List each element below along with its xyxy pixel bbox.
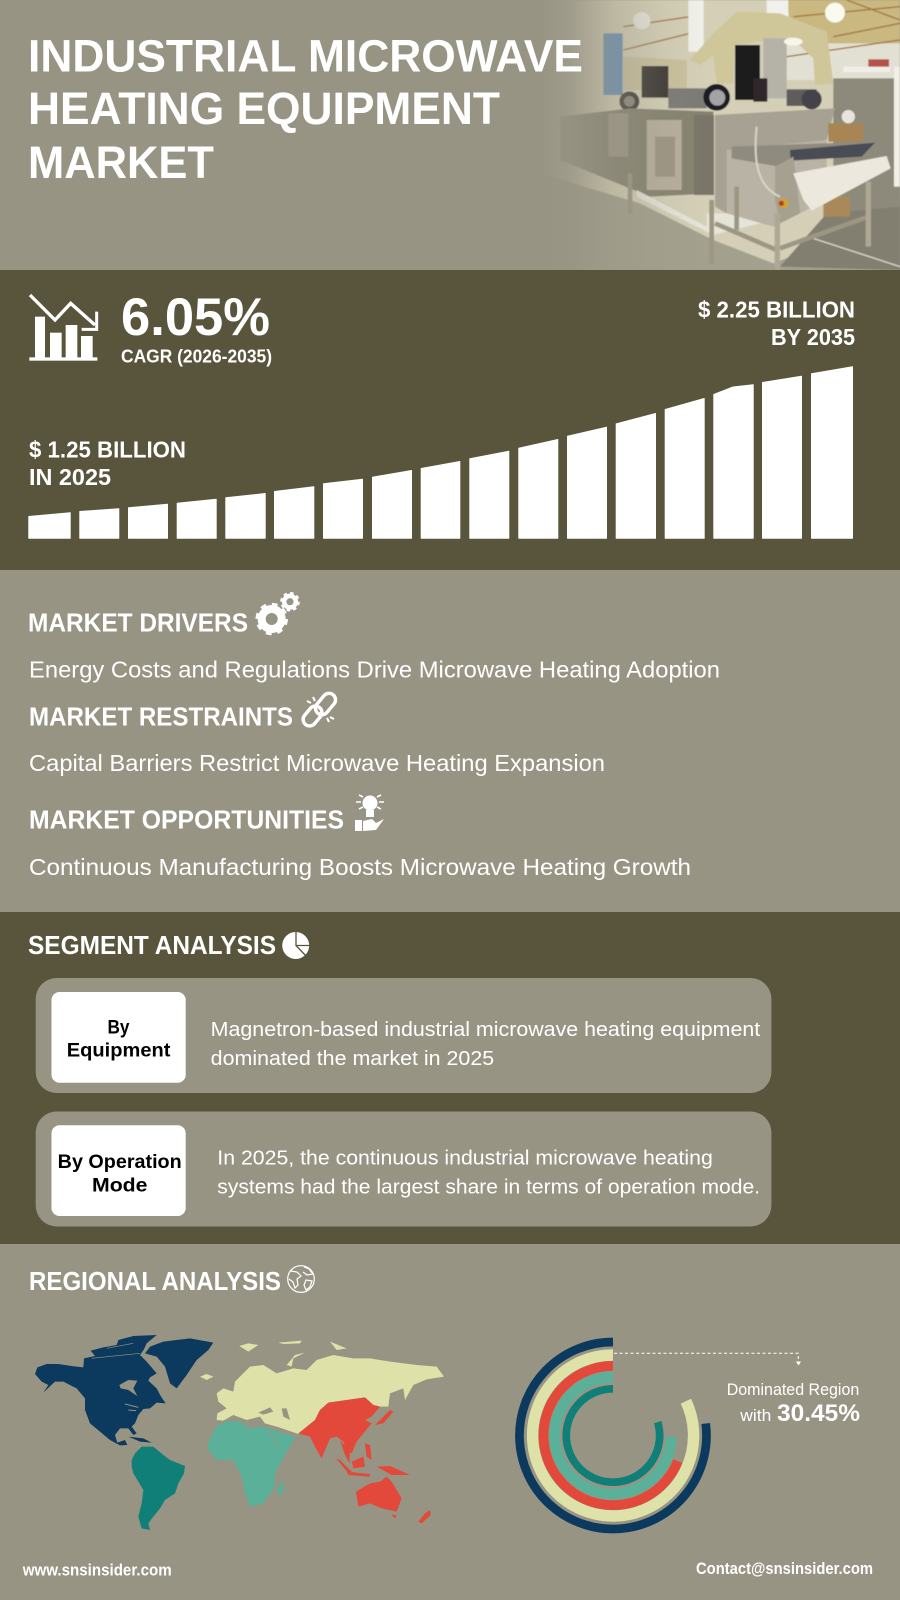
text: opportunity: Continuous Manufacturing Boosts Microwave Heating Growth (29, 854, 691, 880)
end value label: BY 2035 (771, 324, 855, 350)
end value label (698, 296, 855, 350)
text: equipment insight (211, 1019, 761, 1070)
footer: contact: Contact@snsinsider.com (696, 1559, 873, 1578)
photo: microwave heating conveyor machine (540, 0, 900, 270)
label box: by operation mode: By Operation (58, 1151, 182, 1173)
region: South America (132, 1447, 185, 1530)
callout: dominated region (727, 1381, 860, 1427)
panel: header background (0, 0, 900, 270)
heading: market drivers: MARKET DRIVERS (28, 610, 248, 638)
heading: market restraints: MARKET RESTRAINTS (29, 704, 293, 732)
icon: lightbulb in hand (355, 795, 384, 831)
icon: broken chain (300, 691, 338, 729)
text: operation mode insight: systems had the largest share in terms of operation mode. (217, 1177, 760, 1199)
start value label: IN 2025 (29, 464, 111, 490)
text: equipment insight: Magnetron-based industrial microwave heating equipment (211, 1019, 761, 1041)
text: operation mode insight (217, 1147, 760, 1199)
heading: market opportunities: MARKET OPPORTUNITIES (29, 806, 344, 834)
footer: website: www.snsinsider.com (22, 1561, 172, 1580)
region: Europe and North Asia (200, 1341, 444, 1434)
title: MARKET (28, 137, 214, 188)
icon: pie chart (282, 931, 310, 959)
text: driver: Energy Costs and Regulations Drive Microwave Heating Adoption (29, 656, 720, 682)
panel: segment analysis (0, 912, 900, 1244)
end value label: $ 2.25 BILLION (698, 296, 855, 322)
title: HEATING EQUIPMENT (28, 83, 500, 134)
region: North America (35, 1335, 213, 1445)
start value label: $ 1.25 BILLION (29, 436, 186, 462)
region: Africa and Middle East (208, 1421, 296, 1507)
text: restraint: Capital Barriers Restrict Microwave Heating Expansion (29, 750, 605, 776)
callout: dominated region: with (739, 1407, 771, 1425)
card: by operation mode (36, 1112, 771, 1226)
title (28, 30, 583, 188)
card: by equipment (36, 978, 771, 1093)
bar chart: market growth (29, 367, 853, 538)
label box: by equipment (52, 992, 186, 1083)
label box: by operation mode (52, 1125, 186, 1216)
icon: gears (258, 593, 298, 633)
icon: globe (288, 1266, 314, 1292)
text: equipment insight: dominated the market in 2025 (211, 1048, 494, 1070)
photo fade overlay (540, 0, 668, 270)
callout: dominated region: 30.45% (777, 1400, 860, 1427)
icon: trend chart (29, 295, 97, 361)
title: INDUSTRIAL MICROWAVE (28, 30, 583, 82)
dashed callout arrow (614, 1353, 801, 1366)
CAGR label: CAGR (2026-2035) (121, 346, 272, 366)
panel: regional analysis (0, 1244, 900, 1600)
panel: market size band (0, 270, 900, 570)
heading: regional analysis: REGIONAL ANALYSIS (29, 1268, 281, 1296)
start value label (29, 436, 186, 490)
callout: dominated region: Dominated Region (727, 1381, 859, 1399)
label box: by operation mode: Mode (92, 1175, 148, 1197)
world map (35, 1335, 444, 1530)
panel: market dynamics (0, 570, 900, 912)
CAGR value: 6.05% (121, 288, 270, 347)
label box: by equipment: By (108, 1016, 130, 1038)
region: Asia Pacific (298, 1397, 431, 1523)
heading: segment analysis: SEGMENT ANALYSIS (28, 932, 276, 960)
radial chart (519, 1342, 706, 1529)
label box: by equipment: Equipment (67, 1040, 171, 1062)
text: operation mode insight: In 2025, the continuous industrial microwave heating (217, 1147, 713, 1169)
